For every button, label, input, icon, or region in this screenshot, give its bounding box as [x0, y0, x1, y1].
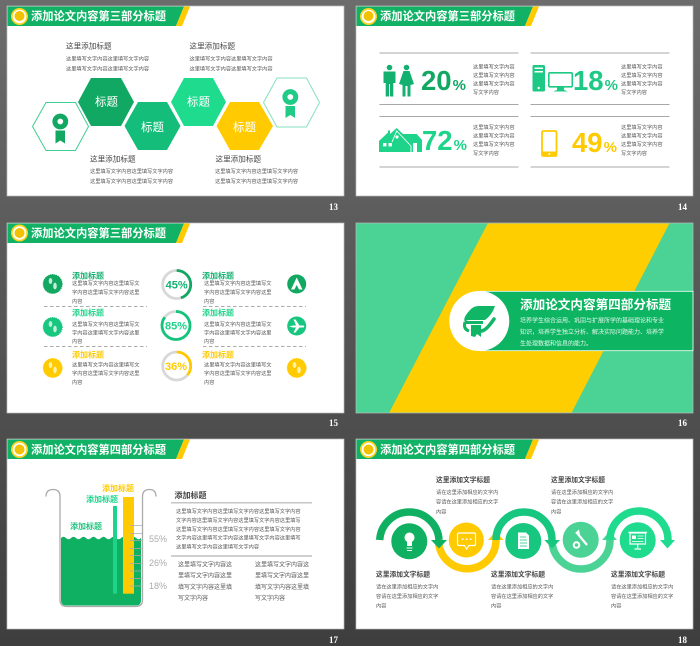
- text block top right: 这里填写文字内容这里填写文字内容: [190, 64, 273, 72]
- percent labels: 18%: [149, 581, 167, 591]
- stat text 1: 这里填写文字内容: [473, 71, 515, 79]
- text bottom 3: 请在这里添加相应的文字内: [611, 582, 673, 590]
- section title: 添加论文内容第四部分标题: [520, 297, 672, 312]
- text top 1: 这里添加文字标题: [436, 475, 490, 484]
- text bottom 1: 请在这里添加相应的文字内: [376, 582, 438, 590]
- yellow arc arrow: [438, 532, 504, 569]
- text block bottom left: [90, 154, 173, 185]
- circle with chat icon: [449, 522, 484, 558]
- dark green arc arrow: [380, 512, 447, 548]
- page number 17: 17: [329, 635, 338, 645]
- text block 3 right: [202, 350, 272, 386]
- text bottom 3: 这里添加文字标题: [611, 570, 665, 578]
- section text: 生处理数据和信息的能力。: [520, 340, 592, 348]
- stat 20%: 20%: [421, 65, 466, 96]
- text top 1: 容请在这里添加相应的文字: [436, 498, 498, 506]
- panel: slide 15 donuts: [7, 223, 344, 413]
- bright green arc arrow: [610, 511, 675, 548]
- stat text 3: [473, 123, 515, 157]
- label mid green: 添加标题: [70, 521, 102, 531]
- text bottom 3: [611, 570, 673, 610]
- header banner 13: [8, 6, 190, 26]
- text top 2: 这里添加文字标题: [551, 475, 605, 484]
- page number 15: 15: [329, 418, 338, 428]
- section text: 培养学生综合运用、巩固与扩展所学的基础理论和专业: [520, 316, 664, 324]
- badge icon right 1 tent: [287, 274, 306, 294]
- header banner 17: 添加论文内容第四部分标题: [31, 442, 166, 456]
- yellow diagonal band: [389, 224, 669, 412]
- badge icon left 3: [43, 358, 62, 378]
- stat text 2: 这里填写文字内容: [621, 80, 663, 88]
- two column text left: 填写文字内容这里填: [178, 583, 232, 591]
- two column text right: 这里填写文字内容这: [255, 560, 309, 568]
- text block 3 left: [72, 350, 140, 386]
- section text: 知识，培养学生独立分析、解决实际问题能力、培养学: [520, 328, 664, 336]
- text block 2 left: 这里填写文字内容这里填写文: [72, 320, 140, 328]
- stat 49%: 49%: [572, 127, 617, 158]
- icon: white circle with book and hand: [449, 291, 509, 351]
- stat text 3: 这里填写文字内容: [473, 140, 515, 148]
- text block bottom left: 这里添加标题: [90, 154, 136, 164]
- text bottom 1: [376, 570, 438, 610]
- text block bottom right: 这里填写文字内容这里填写文字内容: [215, 167, 298, 175]
- mid green arc arrow: [496, 512, 560, 548]
- text block bottom right: 这里填写文字内容这里填写文字内容: [215, 177, 298, 185]
- text block top left: [66, 40, 149, 72]
- page number 13: 13: [329, 202, 338, 212]
- text block bottom right: [215, 154, 298, 185]
- text block 2 left: 字内容这里填写文字内容这里: [72, 328, 139, 336]
- text bottom 2: 容请在这里添加相应的文字: [491, 592, 553, 600]
- header banner 15: [8, 224, 190, 243]
- text block top left: 这里填写文字内容这里填写文字内容: [66, 54, 149, 62]
- page number 16: 16: [678, 418, 688, 428]
- text block 2 left: [72, 308, 140, 345]
- text top 2: 请在这里添加相应的文字内: [551, 488, 613, 496]
- text block bottom right: 这里添加标题: [216, 154, 261, 164]
- hexagon 标题 yellow: [216, 102, 273, 150]
- text bottom 2: [491, 570, 553, 610]
- label green: 添加标题: [86, 494, 118, 504]
- panel: slide 14 percentages: [356, 6, 693, 196]
- header banner 17: [8, 440, 190, 459]
- text block 2 right: 这里填写文字内容这里填写文: [204, 320, 272, 328]
- two column text left: [178, 560, 232, 602]
- header banner 18: [356, 440, 539, 459]
- stat text 4: 写文字内容: [621, 149, 647, 157]
- page number 14: 14: [678, 202, 688, 212]
- text top 2: [551, 475, 613, 515]
- donut 45%: [163, 270, 191, 298]
- hexagon 标题 light green: [171, 78, 226, 126]
- icon: phone: [542, 131, 557, 156]
- text block top right: 这里添加标题: [190, 40, 235, 50]
- text top 2: 容请在这里添加相应的文字: [551, 498, 613, 506]
- header banner 14: 添加论文内容第三部分标题: [380, 9, 515, 23]
- hexagon 标题 dark green: [78, 78, 134, 126]
- text block top left: 这里添加标题: [66, 40, 112, 50]
- text block 1 left: 内容: [72, 297, 82, 305]
- header banner 13: 添加论文内容第三部分标题: [31, 9, 166, 23]
- text block 1 right: 字内容这里填写文字内容这里: [204, 288, 271, 296]
- text block 1 left: [72, 270, 140, 305]
- text block top left: 这里填写文字内容这里填写文字内容: [66, 64, 149, 72]
- stat text 4: 这里填写文字内容: [621, 132, 663, 140]
- two column text right: 里填写文字内容这里: [255, 572, 309, 580]
- stat text 4: [621, 123, 663, 157]
- two column text left: 写文字内容: [178, 594, 208, 602]
- header banner 15: 添加论文内容第三部分标题: [31, 226, 166, 240]
- stat text 1: [473, 62, 515, 96]
- stat text 4: 这里填写文字内容: [621, 123, 663, 131]
- text block 1 right: 内容: [204, 297, 214, 305]
- donut 36%: [163, 352, 191, 380]
- text bottom 2: 这里添加文字标题: [491, 570, 545, 578]
- hexagon 标题 dark green: 标题: [95, 96, 118, 108]
- text block 1 left: 字内容这里填写文字内容这里: [72, 288, 139, 296]
- green title banner: [480, 291, 693, 351]
- stat text 1: 这里填写文字内容: [473, 62, 515, 70]
- text block 1 left: 添加标题: [72, 270, 104, 280]
- stat text 3: 这里填写文字内容: [473, 132, 515, 140]
- circle with tools icon: [563, 522, 599, 558]
- badge icon right 3: [287, 358, 306, 378]
- stat text 3: 这里填写文字内容: [473, 123, 515, 131]
- hexagon 标题 mid green: 标题: [141, 121, 164, 134]
- circle with bulb icon: [391, 523, 427, 559]
- stat 18%: 18%: [573, 65, 618, 96]
- label yellow: 添加标题: [102, 483, 134, 493]
- header banner 14: [356, 6, 539, 26]
- text block top right: [190, 40, 273, 72]
- text block top right: 这里填写文字内容这里填写文字内容: [190, 54, 273, 62]
- header banner 18: 添加论文内容第四部分标题: [380, 442, 515, 456]
- text block 2 right: 内容: [204, 337, 214, 345]
- text block 3 left: 这里填写文字内容这里填写文: [72, 360, 140, 368]
- green bar: [113, 506, 117, 594]
- icon: man and woman: [384, 65, 414, 96]
- text bottom 3: 容请在这里添加相应的文字: [611, 592, 673, 600]
- text bottom 1: 容请在这里添加相应的文字: [376, 592, 438, 600]
- text block 1 left: 这里填写文字内容这里填写文: [72, 279, 140, 287]
- text block 3 right: 这里填写文字内容这里填写文: [204, 360, 272, 368]
- two column text right: [255, 560, 309, 602]
- donut 45%: 45%: [166, 280, 188, 292]
- text bottom 2: 请在这里添加相应的文字内: [491, 582, 553, 590]
- section text: [520, 316, 664, 348]
- text top 1: 请在这里添加相应的文字内: [436, 488, 498, 496]
- beaker water: [61, 537, 141, 606]
- text top 1: 内容: [436, 507, 446, 515]
- text block 3 right: 字内容这里填写文字内容这里: [204, 369, 271, 377]
- badge icon left 1: [43, 274, 62, 294]
- text block 2 right: [202, 308, 272, 345]
- icon: houses: [379, 128, 422, 152]
- stat text 2: 这里填写文字内容: [621, 62, 663, 70]
- body paragraph: 这里填写文字内容这里填写文字内容这里填写文字内容: [176, 507, 301, 515]
- two column text left: 里填写文字内容这里: [178, 572, 232, 580]
- percent labels: 55%: [149, 534, 167, 544]
- text bottom 1: 这里添加文字标题: [376, 570, 430, 578]
- body paragraph: [176, 507, 301, 550]
- hexagon outline with award icon left: [32, 102, 88, 150]
- stat 72%: 72%: [422, 125, 467, 156]
- stat text 1: 这里填写文字内容: [473, 80, 515, 88]
- text block 3 left: 内容: [72, 378, 82, 386]
- body paragraph: 这里填写文字内容这里填写文字内容这里填写文字内容: [176, 525, 301, 533]
- text bottom 1: 内容: [376, 602, 386, 610]
- percent labels: [149, 534, 167, 591]
- two column text right: 写文字内容: [255, 594, 285, 602]
- stat text 4: 这里填写文字内容: [621, 140, 663, 148]
- text block bottom left: 这里填写文字内容这里填写文字内容: [90, 167, 173, 175]
- hexagon 标题 mid green: [124, 102, 180, 150]
- donut 36%: 36%: [165, 361, 187, 373]
- hexagon 标题 light green: 标题: [187, 96, 210, 108]
- stat text 2: 写文字内容: [621, 88, 647, 96]
- text block 3 left: 字内容这里填写文字内容这里: [72, 369, 139, 377]
- body paragraph: 文字内容这里填写文字内容这里填写文字内容这里填写: [176, 534, 301, 542]
- panel: slide 16 section cover: [356, 223, 693, 413]
- donut 85%: [162, 312, 190, 340]
- two column text right: 填写文字内容这里填: [255, 583, 309, 591]
- panel: slide 13 hexagon process: [7, 6, 344, 196]
- panel: slide 17 beaker chart: [7, 439, 344, 629]
- body paragraph: 这里填写文字内容这里填写文字内容: [176, 542, 259, 550]
- text top 2: 内容: [551, 507, 561, 515]
- stat text 1: 写文字内容: [473, 88, 499, 96]
- text block 1 right: [202, 270, 272, 305]
- hexagon 标题 yellow: 标题: [233, 121, 256, 134]
- text block 3 left: 添加标题: [72, 350, 104, 360]
- two column text left: 这里填写文字内容这: [178, 560, 232, 568]
- yellow bar: [123, 497, 134, 594]
- text block 3 right: 内容: [204, 378, 214, 386]
- text block bottom left: 这里填写文字内容这里填写文字内容: [90, 177, 173, 185]
- circle with document icon: [505, 523, 541, 559]
- badge icon right 2 plane: [287, 316, 306, 336]
- text block 2 left: 添加标题: [72, 308, 104, 318]
- page number 18: 18: [678, 635, 688, 645]
- beaker outline: [46, 490, 156, 606]
- percent labels: 26%: [149, 558, 167, 568]
- text top 1: [436, 475, 498, 515]
- hexagon outline with award icon right: [264, 78, 320, 127]
- text bottom 2: 内容: [491, 602, 501, 610]
- circle with presentation icon: [620, 522, 656, 558]
- text block 2 right: 添加标题: [202, 308, 234, 318]
- text block 1 right: 添加标题: [202, 270, 234, 280]
- panel: slide 18 arrow process: [356, 439, 693, 629]
- stat text 2: 这里填写文字内容: [621, 71, 663, 79]
- right heading: 添加标题: [174, 490, 206, 500]
- light green lower arc arrow: [552, 532, 617, 569]
- text block 1 right: 这里填写文字内容这里填写文: [204, 279, 272, 287]
- badge icon left 2: [43, 318, 62, 336]
- text block 2 right: 字内容这里填写文字内容这里: [204, 328, 271, 336]
- stat text 2: [621, 62, 663, 96]
- body paragraph: 文字内容这里填写文字内容这里填写文字内容这里填写: [176, 516, 301, 524]
- text block 3 right: 添加标题: [202, 350, 234, 360]
- donut 85%: 85%: [165, 320, 187, 332]
- icon: computer: [532, 65, 572, 92]
- text bottom 3: 内容: [611, 602, 621, 610]
- text block 2 left: 内容: [72, 337, 82, 345]
- stat text 3: 写文字内容: [473, 149, 499, 157]
